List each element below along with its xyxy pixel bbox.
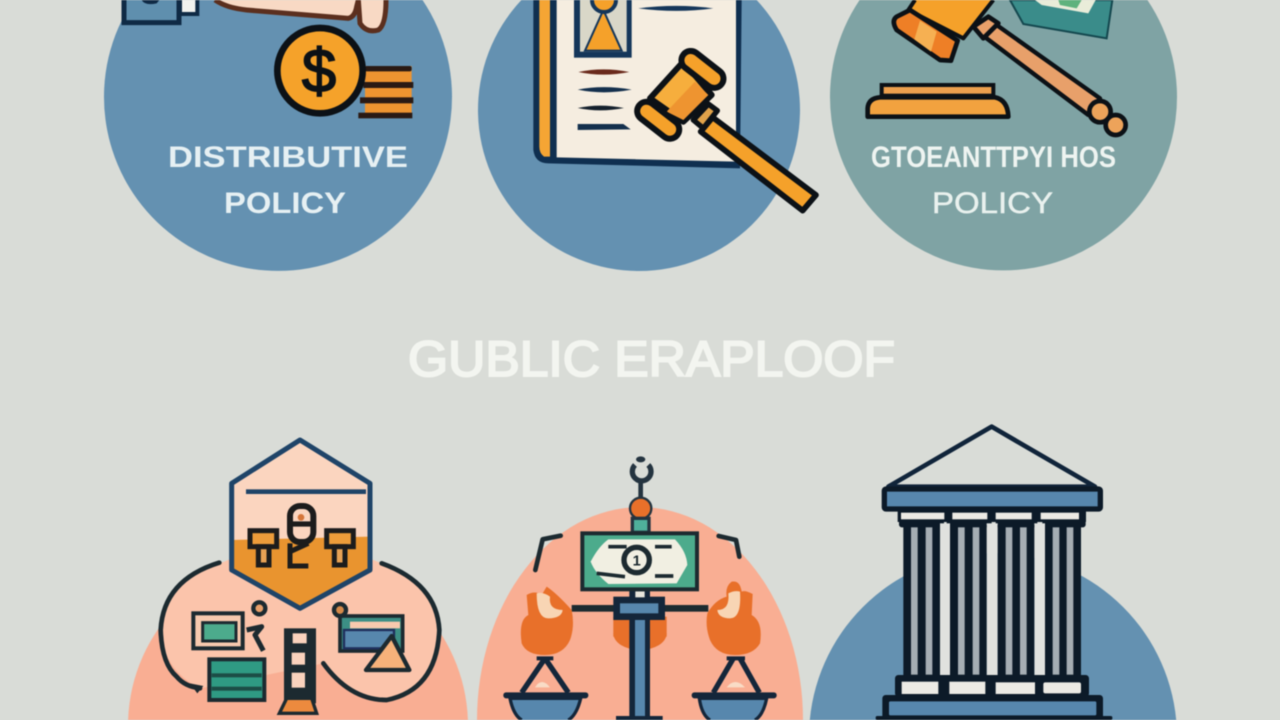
icon: right hand and pan [692,581,777,720]
panel: balance scale icon [477,456,803,720]
icon: classical building [876,427,1112,720]
icon: hand with coin [124,0,413,118]
icon: banknote: 1 [633,553,641,569]
icon: top ring [630,456,651,532]
icon: left hand and pan [503,587,588,720]
icon: gavel [633,47,816,211]
icon: pediment [888,427,1095,487]
label: policy: POLICY [224,187,346,220]
icon: hexagon with figures [232,440,370,608]
icon: side brackets [535,536,739,570]
icon: computer, panel, tower and card [193,602,409,713]
icon: policy document [533,0,742,168]
panel: distributive policy [104,0,452,271]
label: distributive: DISTRIBUTIVE [168,141,408,174]
icon: banknotes [1010,0,1112,38]
panel: redistributive policy [830,0,1177,270]
icon: hand with coin: $ [302,37,336,106]
label: policy: POLICY [932,187,1053,220]
icon: capitals [898,509,1086,527]
panel: institution icon [810,427,1176,720]
icon: gavel and sound block [868,0,1126,135]
icon: banknote [582,533,697,589]
panel: network icon [128,440,468,720]
icon: stepped base [876,675,1112,720]
icon: connected loops [161,530,439,700]
label: garbled heading: GTOEANTTPYI HOS [871,141,1116,174]
title: GUBLIC ERAPLOOF [408,331,895,387]
panel: regulatory document and gavel [478,0,816,271]
icon: columns [903,523,1081,678]
icon: scale with banknote [503,456,777,720]
